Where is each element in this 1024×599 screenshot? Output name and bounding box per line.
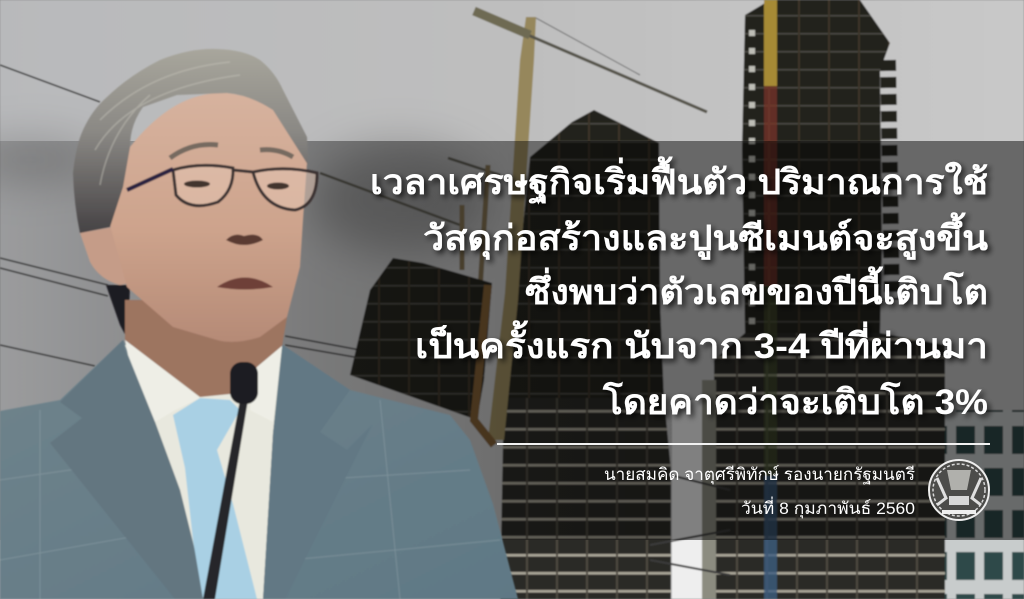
eyebrows — [170, 145, 293, 158]
microphone — [203, 362, 258, 599]
wires in gap — [650, 470, 730, 575]
hair — [73, 49, 308, 233]
icon: government seal — [929, 460, 989, 520]
plaid pattern on jacket — [0, 400, 500, 599]
hair streaks — [95, 62, 240, 185]
tall tower upper — [742, 0, 890, 335]
attribution: นายสมคิด จาตุศรีพิทักษ์ รองนายกรัฐมนตรี — [604, 465, 915, 485]
neck shadow — [106, 285, 130, 340]
quote headline: โดยคาดว่าจะเติบโต 3% — [602, 381, 988, 422]
head — [73, 49, 317, 342]
tall tower lower floors — [714, 333, 945, 599]
person: speaker in grey suit — [0, 49, 518, 599]
quote headline: ซึ่งพบว่าตัวเลขของปีนี้เติบโต — [525, 266, 988, 312]
glasses — [127, 165, 317, 210]
nose — [226, 235, 263, 245]
second crane — [462, 165, 488, 290]
suit jacket — [0, 340, 518, 599]
tower left edge balconies — [749, 30, 755, 330]
left collar — [125, 340, 200, 422]
building far right — [945, 410, 1024, 599]
middle tower — [507, 110, 664, 400]
orange scaffold beside small tower — [474, 285, 494, 445]
eyes — [184, 180, 289, 190]
neck — [125, 300, 290, 397]
tower crane — [474, 11, 707, 440]
quote headline — [370, 156, 988, 422]
right lapel — [263, 345, 372, 599]
quote headline: เป็นครั้งแรก นับจาก 3-4 ปีที่ผ่านมา — [415, 320, 988, 366]
utility pole — [702, 380, 716, 599]
tower right balconies — [888, 60, 892, 300]
scaffold colours on tall tower — [764, 0, 777, 599]
ear — [80, 227, 130, 285]
left lapel — [50, 340, 207, 599]
attribution — [604, 465, 915, 519]
shirt — [125, 345, 282, 599]
dark translucent band — [0, 141, 1024, 540]
small tower left — [350, 258, 492, 420]
mouth — [217, 278, 273, 290]
faint crane jib behind — [320, 158, 500, 225]
storm clouds — [0, 142, 490, 255]
quote headline: เวลาเศรษฐกิจเริ่มฟื้นตัว ปริมาณการใช้ — [370, 156, 988, 205]
middle tower lower floors — [500, 398, 671, 599]
attribution: วันที่ 8 กุมภาพันธ์ 2560 — [741, 496, 915, 519]
right collar — [250, 346, 282, 422]
bright gap sky at bottom — [672, 400, 702, 599]
tie — [173, 398, 257, 599]
quote headline: วัสดุก่อสร้างและปูนซีเมนต์จะสูงขึ้น — [423, 212, 988, 260]
power lines — [0, 65, 360, 366]
face — [110, 93, 307, 342]
